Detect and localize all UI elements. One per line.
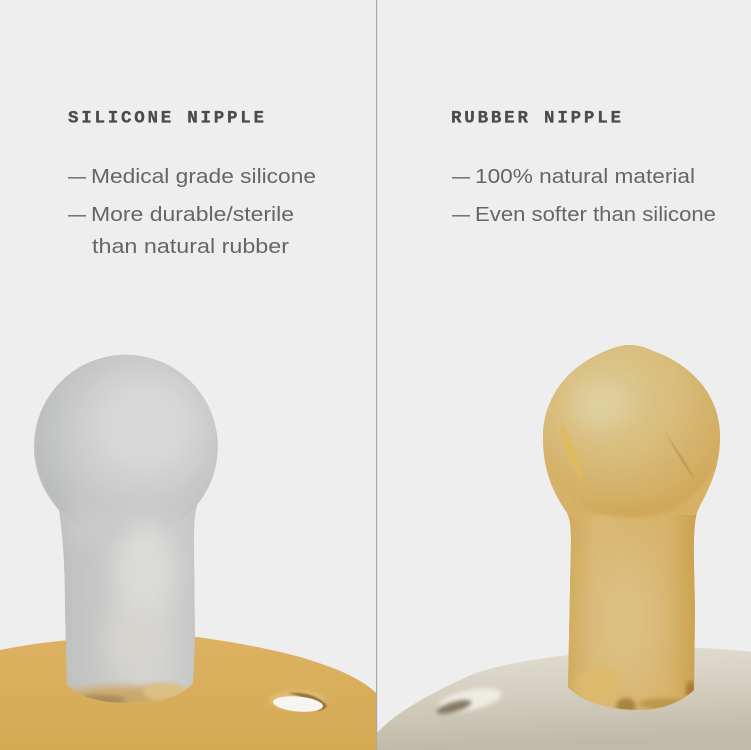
bullet: even softer than silicone: —: [452, 203, 470, 226]
bullet: 100% natural material: 100% natural material: [475, 165, 695, 188]
illustration: silicone nipple on yellow pacifier shield: [0, 350, 376, 750]
bullet continuation: than natural rubber: than natural rubber: [92, 235, 289, 258]
bullet: even softer than silicone: Even softer than silicone: [475, 203, 716, 226]
illustration: rubber nipple on cream pacifier shield: [377, 340, 751, 750]
yellow shield: [0, 637, 376, 750]
bullet: medical grade silicone: Medical grade silicone: [91, 165, 316, 188]
embossed lettering on stem: [666, 552, 670, 632]
panel: silicone nipple text: [68, 108, 316, 258]
shield hole: [435, 684, 503, 717]
heading: rubber nipple: RUBBER NIPPLE: [451, 108, 621, 128]
left slit: [560, 423, 584, 482]
bullet: medical grade silicone: —: [68, 165, 86, 188]
panel: rubber nipple text: [451, 108, 716, 226]
silicone nipple: [30, 350, 225, 710]
rubber nipple: [539, 340, 725, 715]
bullet: more durable/sterile: —: [68, 203, 86, 226]
right slit: [663, 428, 695, 479]
shield hole: [269, 690, 327, 714]
heading: silicone nipple: SILICONE NIPPLE: [68, 108, 264, 128]
cream shield: [377, 648, 751, 750]
bullet: more durable/sterile: More durable/sterile: [91, 203, 294, 226]
bullet: 100% natural material: —: [452, 165, 470, 188]
divider: [376, 0, 377, 750]
